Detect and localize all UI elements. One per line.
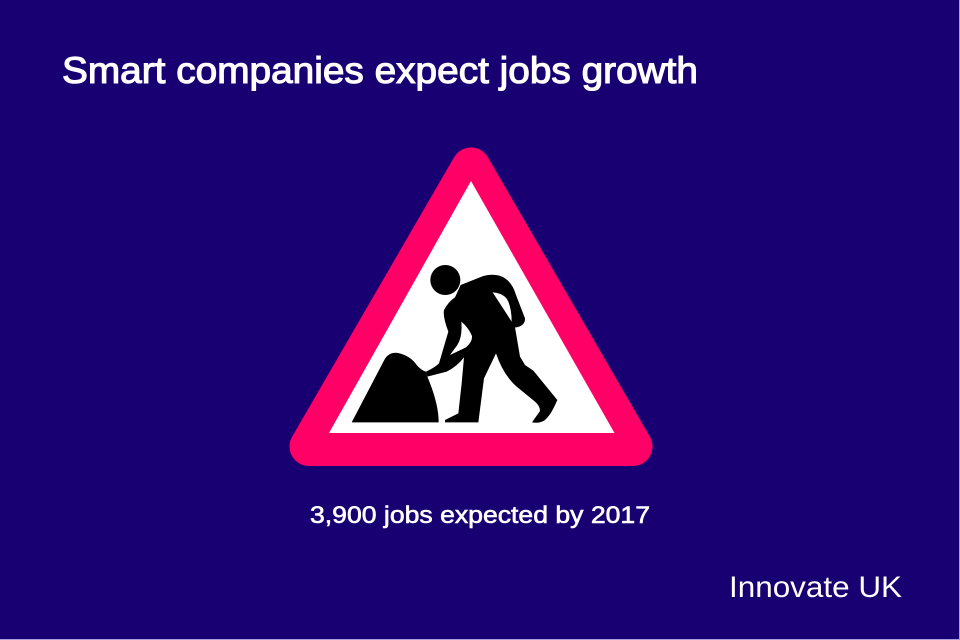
title: Smart companies expect jobs growth [62, 50, 698, 91]
subtitle: jobs expected: 3,900 jobs expected by 2017 [310, 502, 650, 529]
sign: white triangle centre [329, 181, 614, 433]
worker head [430, 265, 460, 295]
icon: worker digging [426, 265, 557, 423]
icon: men at work warning sign [309, 167, 633, 446]
logo: Innovate UK: Innovate UK [729, 571, 902, 604]
worker body [426, 275, 557, 423]
icon: mound of earth [352, 353, 439, 422]
sign: pink triangle border [309, 167, 633, 446]
